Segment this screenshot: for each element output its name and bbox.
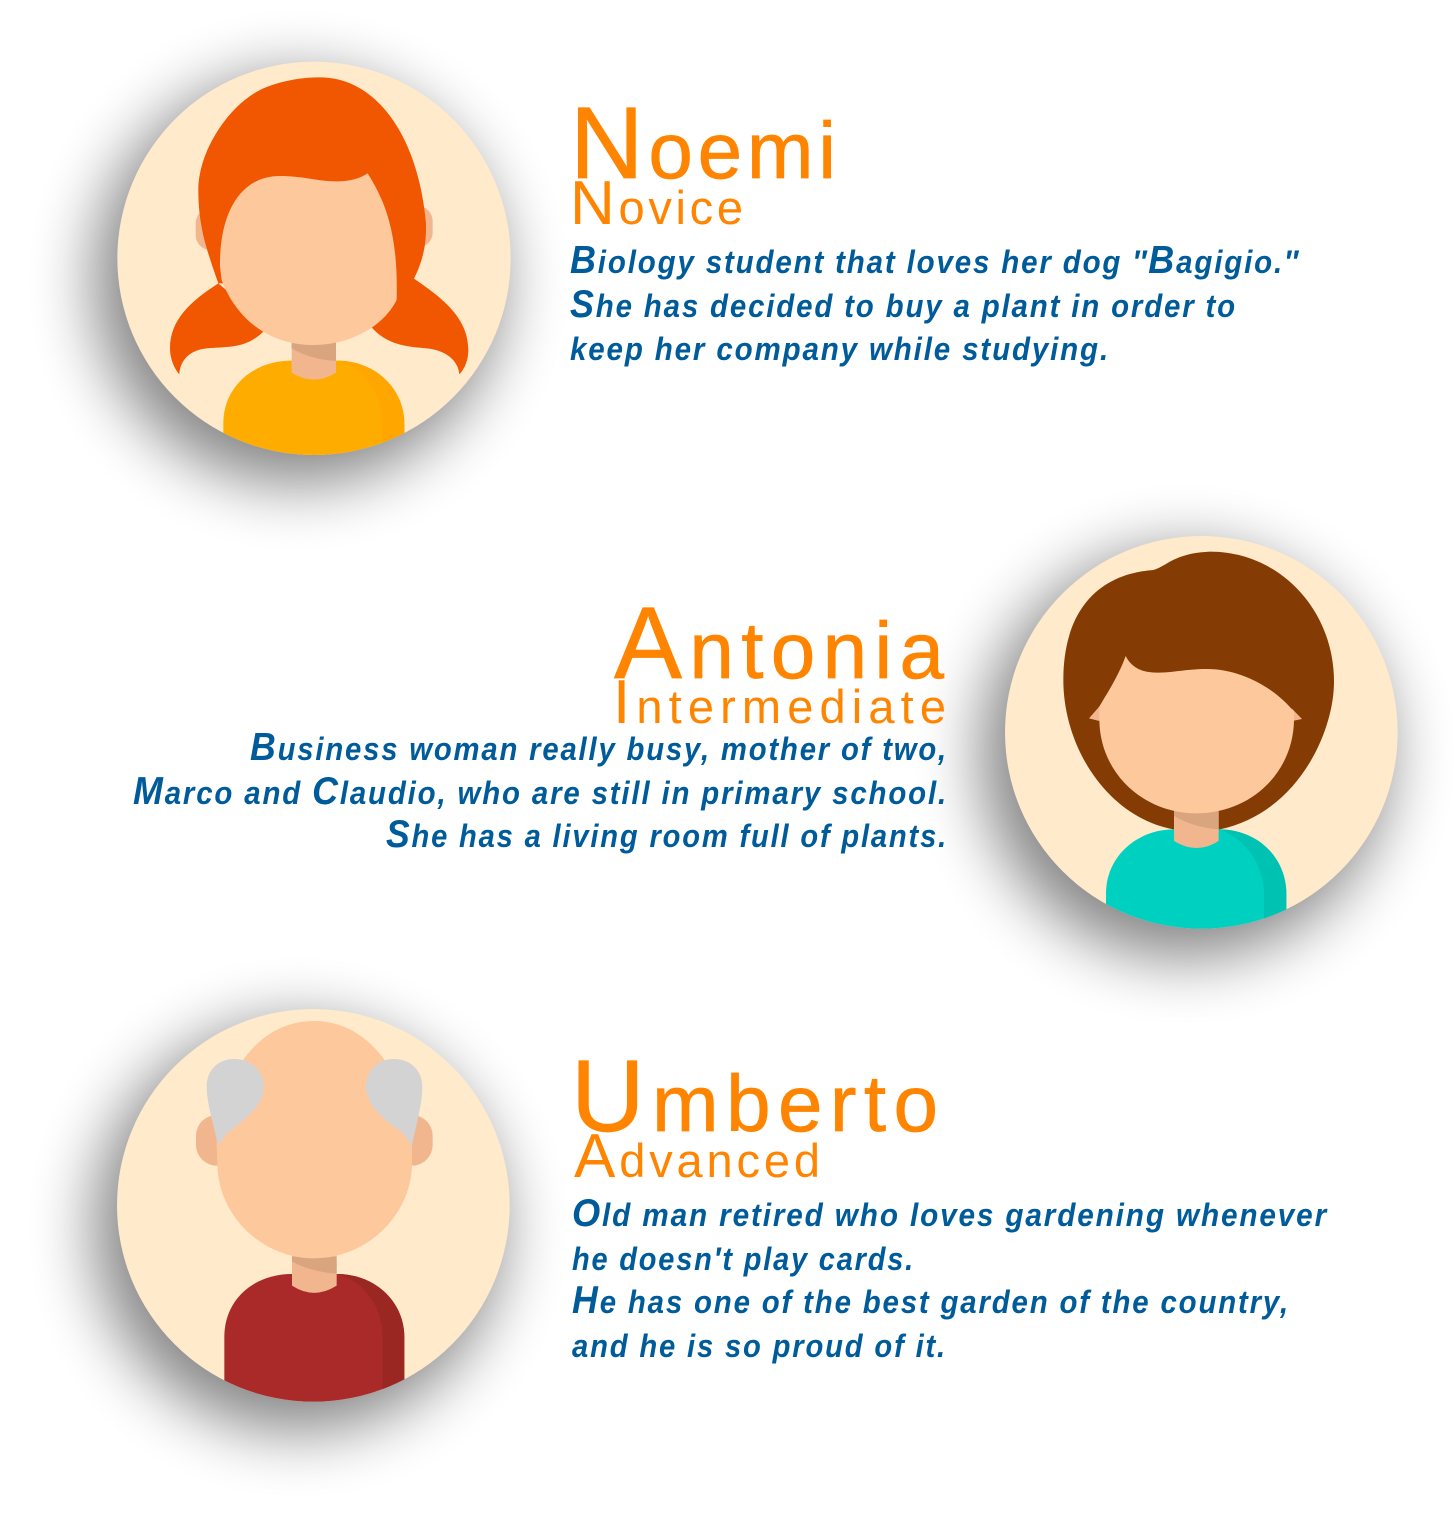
description: Noemi [570,239,1300,367]
description: Antonia: Marco and Claudio, who are still in primary school. [133,770,948,813]
level: Intermediate: Intermediate [613,668,946,737]
description: Umberto: He has one of the best garden of the country, [572,1279,1290,1322]
avatar: Antonia [981,536,1398,958]
panel: Umberto persona [94,1009,1328,1431]
description: Antonia: She has a living room full of plants. [386,813,948,856]
level: Novice: Novice [570,169,743,238]
description: Antonia [133,726,948,856]
panel: Noemi persona [94,62,1300,484]
name: Noemi: Noemi [570,86,836,200]
description: Umberto: he doesn′t play cards. [572,1241,915,1277]
description: Umberto: and he is so proud of it. [572,1328,947,1364]
level: Advanced: Advanced [574,1122,820,1191]
description: Noemi: keep her company while studying. [570,331,1110,367]
description: Umberto: Old man retired who loves gardening whenever [572,1192,1328,1235]
avatar: Noemi [94,62,511,484]
description: Umberto [572,1192,1328,1364]
description: Noemi: Biology student that loves her dog ″Bagigio.″ [570,239,1300,282]
panel: Antonia persona [133,536,1398,958]
name: Umberto: Umberto [571,1039,938,1153]
description: Antonia: Business woman really busy, mother of two, [250,726,948,769]
avatar: Umberto [94,1009,510,1431]
description: Noemi: She has decided to buy a plant in order to [570,283,1237,326]
name: Antonia: Antonia [614,586,944,700]
